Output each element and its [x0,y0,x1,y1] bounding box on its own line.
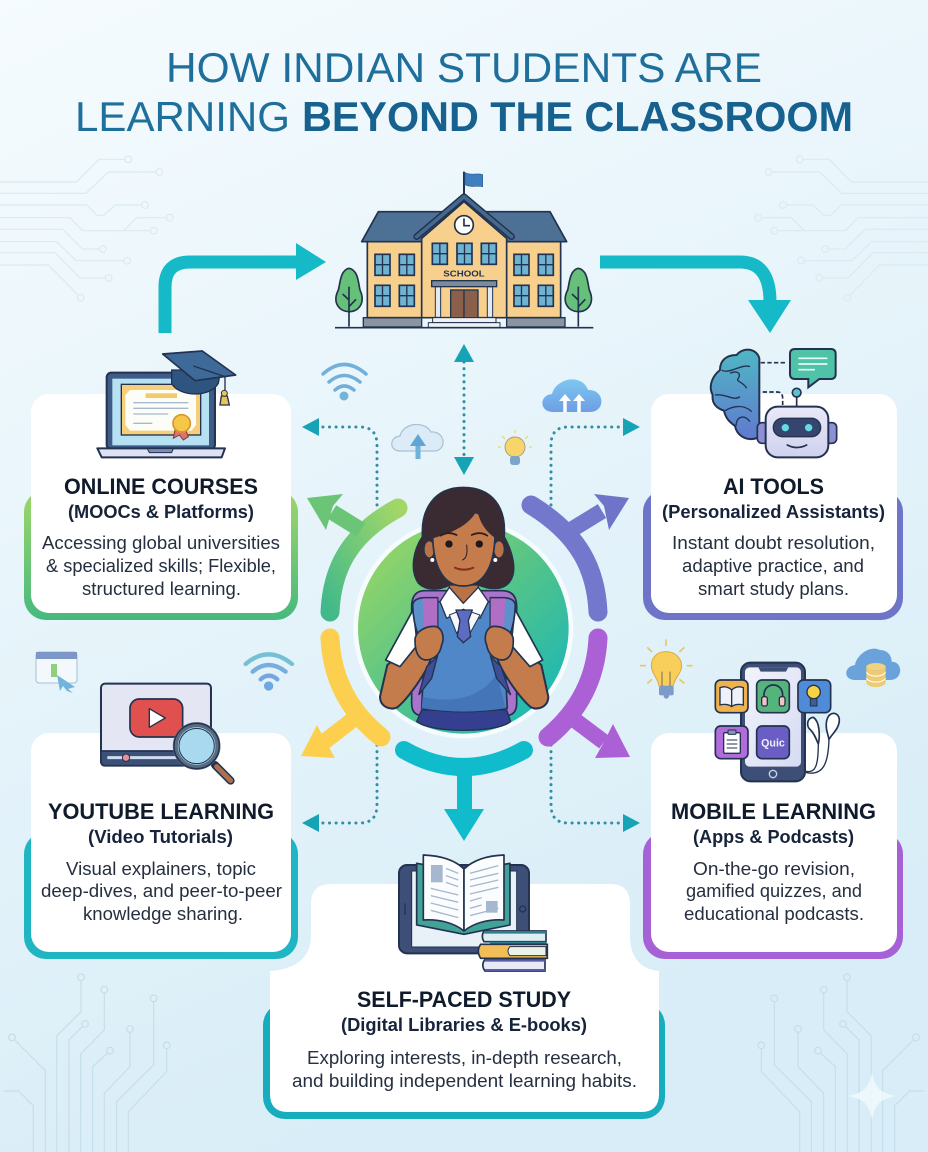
arrow: courses to school [165,243,326,333]
YouTube heading [48,799,274,847]
icon: wifi top [323,364,366,400]
icon: tablet and books [399,855,547,971]
face [433,510,495,586]
backpack [412,591,517,716]
online courses description: Accessing global universities [42,533,280,553]
AI tools heading: AI TOOLS [723,474,824,499]
YouTube description [41,859,282,924]
AI tools heading [662,474,885,522]
decorative sparkle [848,1072,896,1120]
YouTube heading: YOUTUBE LEARNING [48,799,274,824]
ears [424,541,435,558]
hair back [413,487,514,589]
self-paced heading: (Digital Libraries & E-books) [341,1015,587,1035]
self-paced description: and building independent learning habits. [292,1071,637,1091]
mobile description: gamified quizzes, and [686,881,862,901]
title: BEYOND THE CLASSROOM [302,93,853,140]
dotted arrows [302,344,640,832]
YouTube description: knowledge sharing. [83,904,243,924]
mobile description [684,859,864,924]
fringe [432,493,498,538]
icon: phone and apps [715,663,839,781]
icon: phone and apps: Quic [761,737,785,749]
circle backdrop [353,518,573,738]
icon: cloud arrows [542,379,601,412]
straps [413,598,438,647]
icon: online course laptop [97,351,236,457]
AI tools description [672,533,875,599]
online courses heading: ONLINE COURSES [64,474,258,499]
panel: self-paced study [263,884,665,1119]
arrow: to self-paced study (teal) [404,750,524,841]
facial features [441,533,487,570]
icon: AI brain robot [711,349,837,457]
YouTube description: deep-dives, and peer-to-peer [41,881,282,901]
collar and tie [440,587,488,618]
mobile description: On-the-go revision, [693,859,855,879]
icon: cloud upload [392,424,443,459]
student circle [353,487,573,738]
online courses heading: (MOOCs & Platforms) [68,502,254,522]
self-paced heading: SELF-PACED STUDY [357,987,571,1012]
self-paced description: Exploring interests, in-depth research, [307,1048,622,1068]
title: LEARNING [75,93,290,140]
icon: wifi left [246,654,292,691]
self-paced description [292,1048,637,1091]
icon: school building: SCHOOL [443,268,485,278]
online courses description [42,533,280,599]
panel: online courses [24,394,298,620]
neck [449,577,478,612]
icon: school building [335,172,593,328]
arrow: to mobile (purple) [548,638,630,758]
self-paced heading [341,987,587,1035]
online courses description: structured learning. [82,579,241,599]
arrow: to YouTube (yellow) [301,638,381,758]
arrow: to online courses (green) [307,494,398,612]
YouTube description: Visual explainers, topic [66,859,256,879]
panel: AI tools [643,394,903,620]
title: HOW INDIAN STUDENTS ARE [166,44,762,91]
icon: browser cursor [36,652,77,693]
mobile heading: (Apps & Podcasts) [693,827,854,847]
icon: video player [101,684,231,781]
AI tools description: adaptive practice, and [682,556,864,576]
icon: cloud database [846,649,900,687]
AI tools description: smart study plans. [698,579,849,599]
arrow: school to AI tools [600,262,791,333]
arms [380,643,432,708]
panel: YouTube learning [24,733,298,959]
mobile description: educational podcasts. [684,904,864,924]
AI tools description: Instant doubt resolution, [672,533,875,553]
YouTube heading: (Video Tutorials) [88,827,233,847]
AI tools heading: (Personalized Assistants) [662,502,885,522]
mobile heading [671,799,876,847]
icon: lightbulb small [498,430,532,465]
sleeves [386,609,417,667]
online courses heading [64,474,258,522]
skirt [417,710,511,730]
icon: lightbulb large [640,639,693,699]
title [75,44,853,140]
arrow: to AI tools (blue-purple) [531,494,629,612]
vest [422,602,507,712]
online courses description: & specialized skills; Flexible, [46,556,276,576]
panel: mobile learning [643,733,903,959]
mobile heading: MOBILE LEARNING [671,799,876,824]
hands [415,626,443,660]
